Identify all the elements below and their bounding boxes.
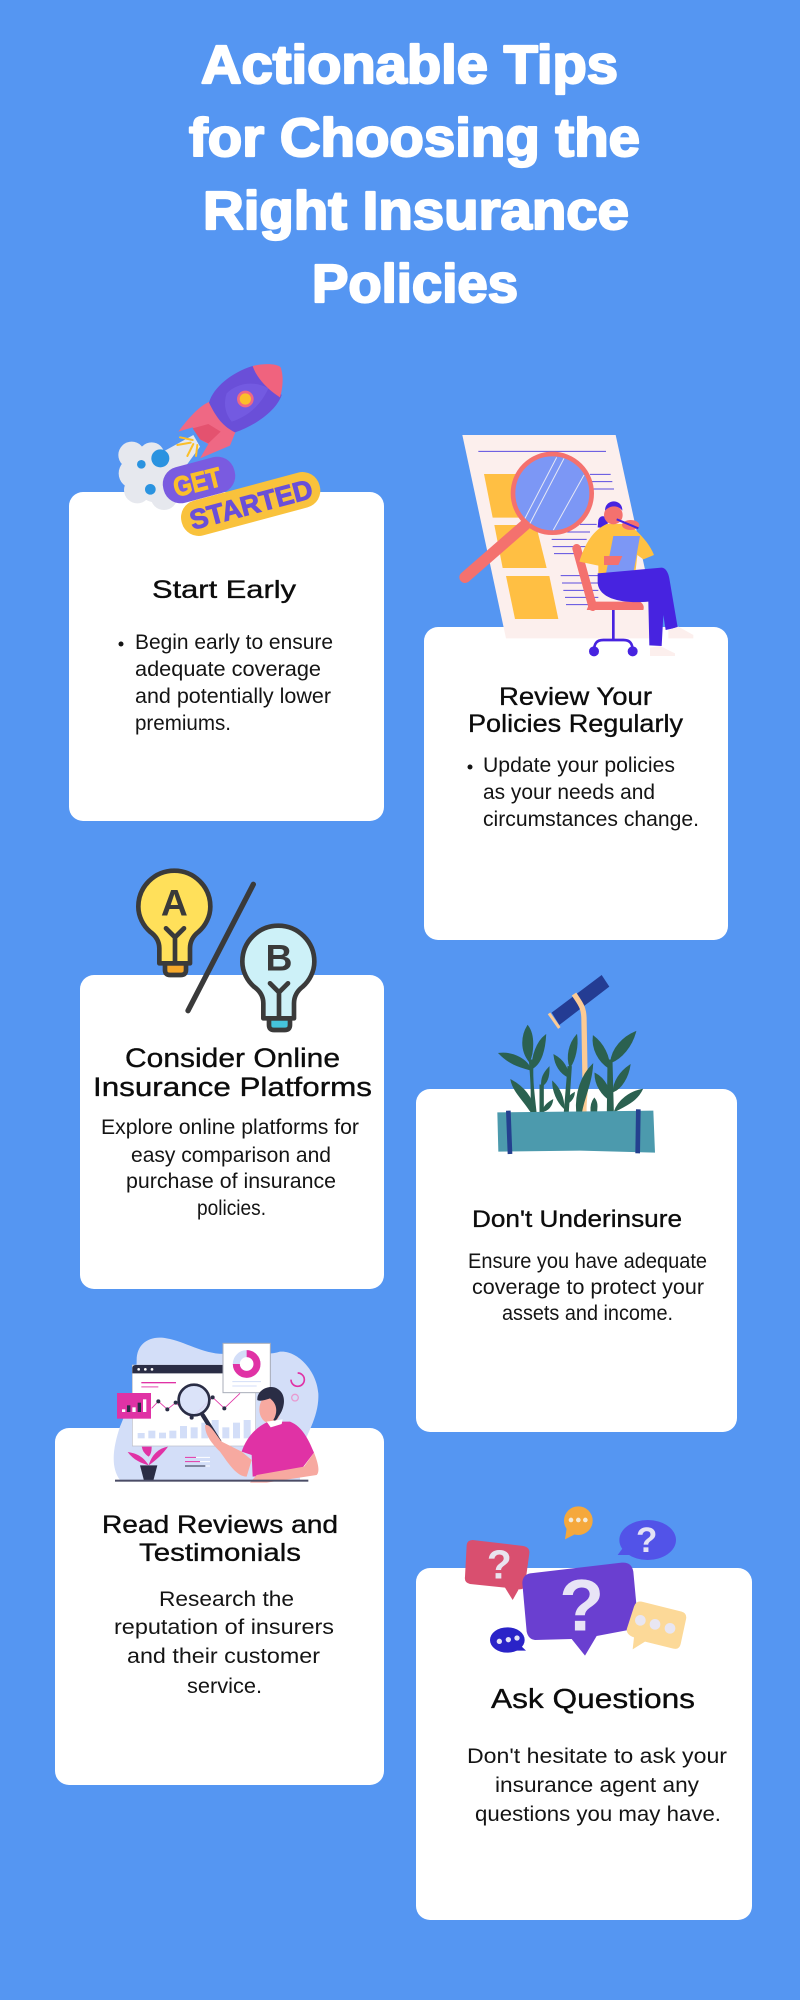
heading: read reviews and testimonials: Read Reviews and [102,1511,338,1539]
bullet text: and potentially lower [135,685,331,708]
bulb a [138,871,210,975]
heading: read reviews and testimonials: Testimonials [139,1539,301,1567]
body text: Explore online platforms for [101,1116,359,1139]
bulb b: B [266,936,292,978]
title: Actionable Tips [201,35,618,95]
panel: consider online insurance platforms [80,871,384,1289]
body text [114,1588,334,1698]
body text: reputation of insurers [114,1616,334,1639]
body text: policies. [197,1197,266,1220]
heading: consider online insurance platforms: Consider Online [125,1043,340,1073]
card [69,492,384,821]
body text [467,1745,727,1826]
body text: easy comparison and [131,1144,331,1167]
body text: Research the [159,1588,294,1611]
blue question bubble: ? [636,1521,657,1560]
bullet text: adequate coverage [135,658,321,681]
heading: review your policies regularly: Review Your [499,683,652,711]
bullet text: Begin early to ensure [135,631,333,654]
heading: start early: Start Early [152,576,297,604]
body text: assets and income. [502,1302,673,1325]
red question bubble: ? [487,1542,512,1588]
purple question bubble [522,1563,638,1656]
panel: review your policies regularly [424,435,728,940]
blue question bubble [618,1520,676,1560]
body text: coverage to protect your [472,1276,704,1299]
small blue dots bubble [490,1627,526,1653]
panel: start early [69,364,384,821]
purple question bubble: ? [559,1565,604,1647]
bulb a: A [161,881,188,923]
body text [468,1250,707,1325]
divider slash [188,884,253,1011]
title: Policies [312,254,518,314]
card [80,975,384,1289]
bulb b [242,926,314,1030]
body text: purchase of insurance [126,1170,336,1193]
icon: woman reviewing a document with magnifier [462,435,693,656]
heading: review your policies regularly [468,683,684,738]
body text: Don't hesitate to ask your [467,1745,727,1768]
body text: insurance agent any [495,1774,700,1797]
card [55,1428,384,1785]
title [189,35,640,314]
body text: service. [187,1675,262,1698]
heading: review your policies regularly: Policies Regularly [468,710,684,738]
heading: consider online insurance platforms [93,1043,372,1102]
red question bubble [465,1540,529,1600]
icon: rocket with get started badges: STARTED [186,473,316,536]
card [416,1568,752,1920]
card [416,1089,737,1432]
yellow dots bubble [627,1602,686,1649]
bullet text: Update your policies [483,754,675,777]
title: for Choosing the [189,108,640,168]
icon: rocket with get started badges [118,364,324,540]
icon: telescope over plants on a mat [497,975,655,1154]
body text: questions you may have. [475,1803,721,1826]
bullet text [468,754,699,831]
icon: man inspecting analytics dashboard [114,1338,318,1483]
heading: consider online insurance platforms: Insurance Platforms [93,1072,372,1102]
panel: ask questions [416,1506,752,1920]
bullet text: as your needs and [483,781,655,804]
card [424,627,728,940]
heading: ask questions: Ask Questions [491,1683,695,1714]
heading: read reviews and testimonials [102,1511,338,1567]
orange bubble [564,1506,593,1539]
icon: a/b light bulbs [138,871,314,1030]
icon: question speech bubbles [465,1506,686,1656]
bullet text: circumstances change. [483,808,699,831]
body text: and their customer [127,1645,320,1668]
bullet text: premiums. [135,712,231,735]
body text [101,1116,359,1220]
panel: don't underinsure [416,975,737,1432]
icon: rocket with get started badges: GET [170,461,225,503]
bullet text [118,631,333,735]
body text: Ensure you have adequate [468,1250,707,1273]
panel: read reviews and testimonials [55,1338,384,1785]
heading: don't underinsure: Don't Underinsure [472,1206,682,1233]
title: Right Insurance [203,181,629,241]
